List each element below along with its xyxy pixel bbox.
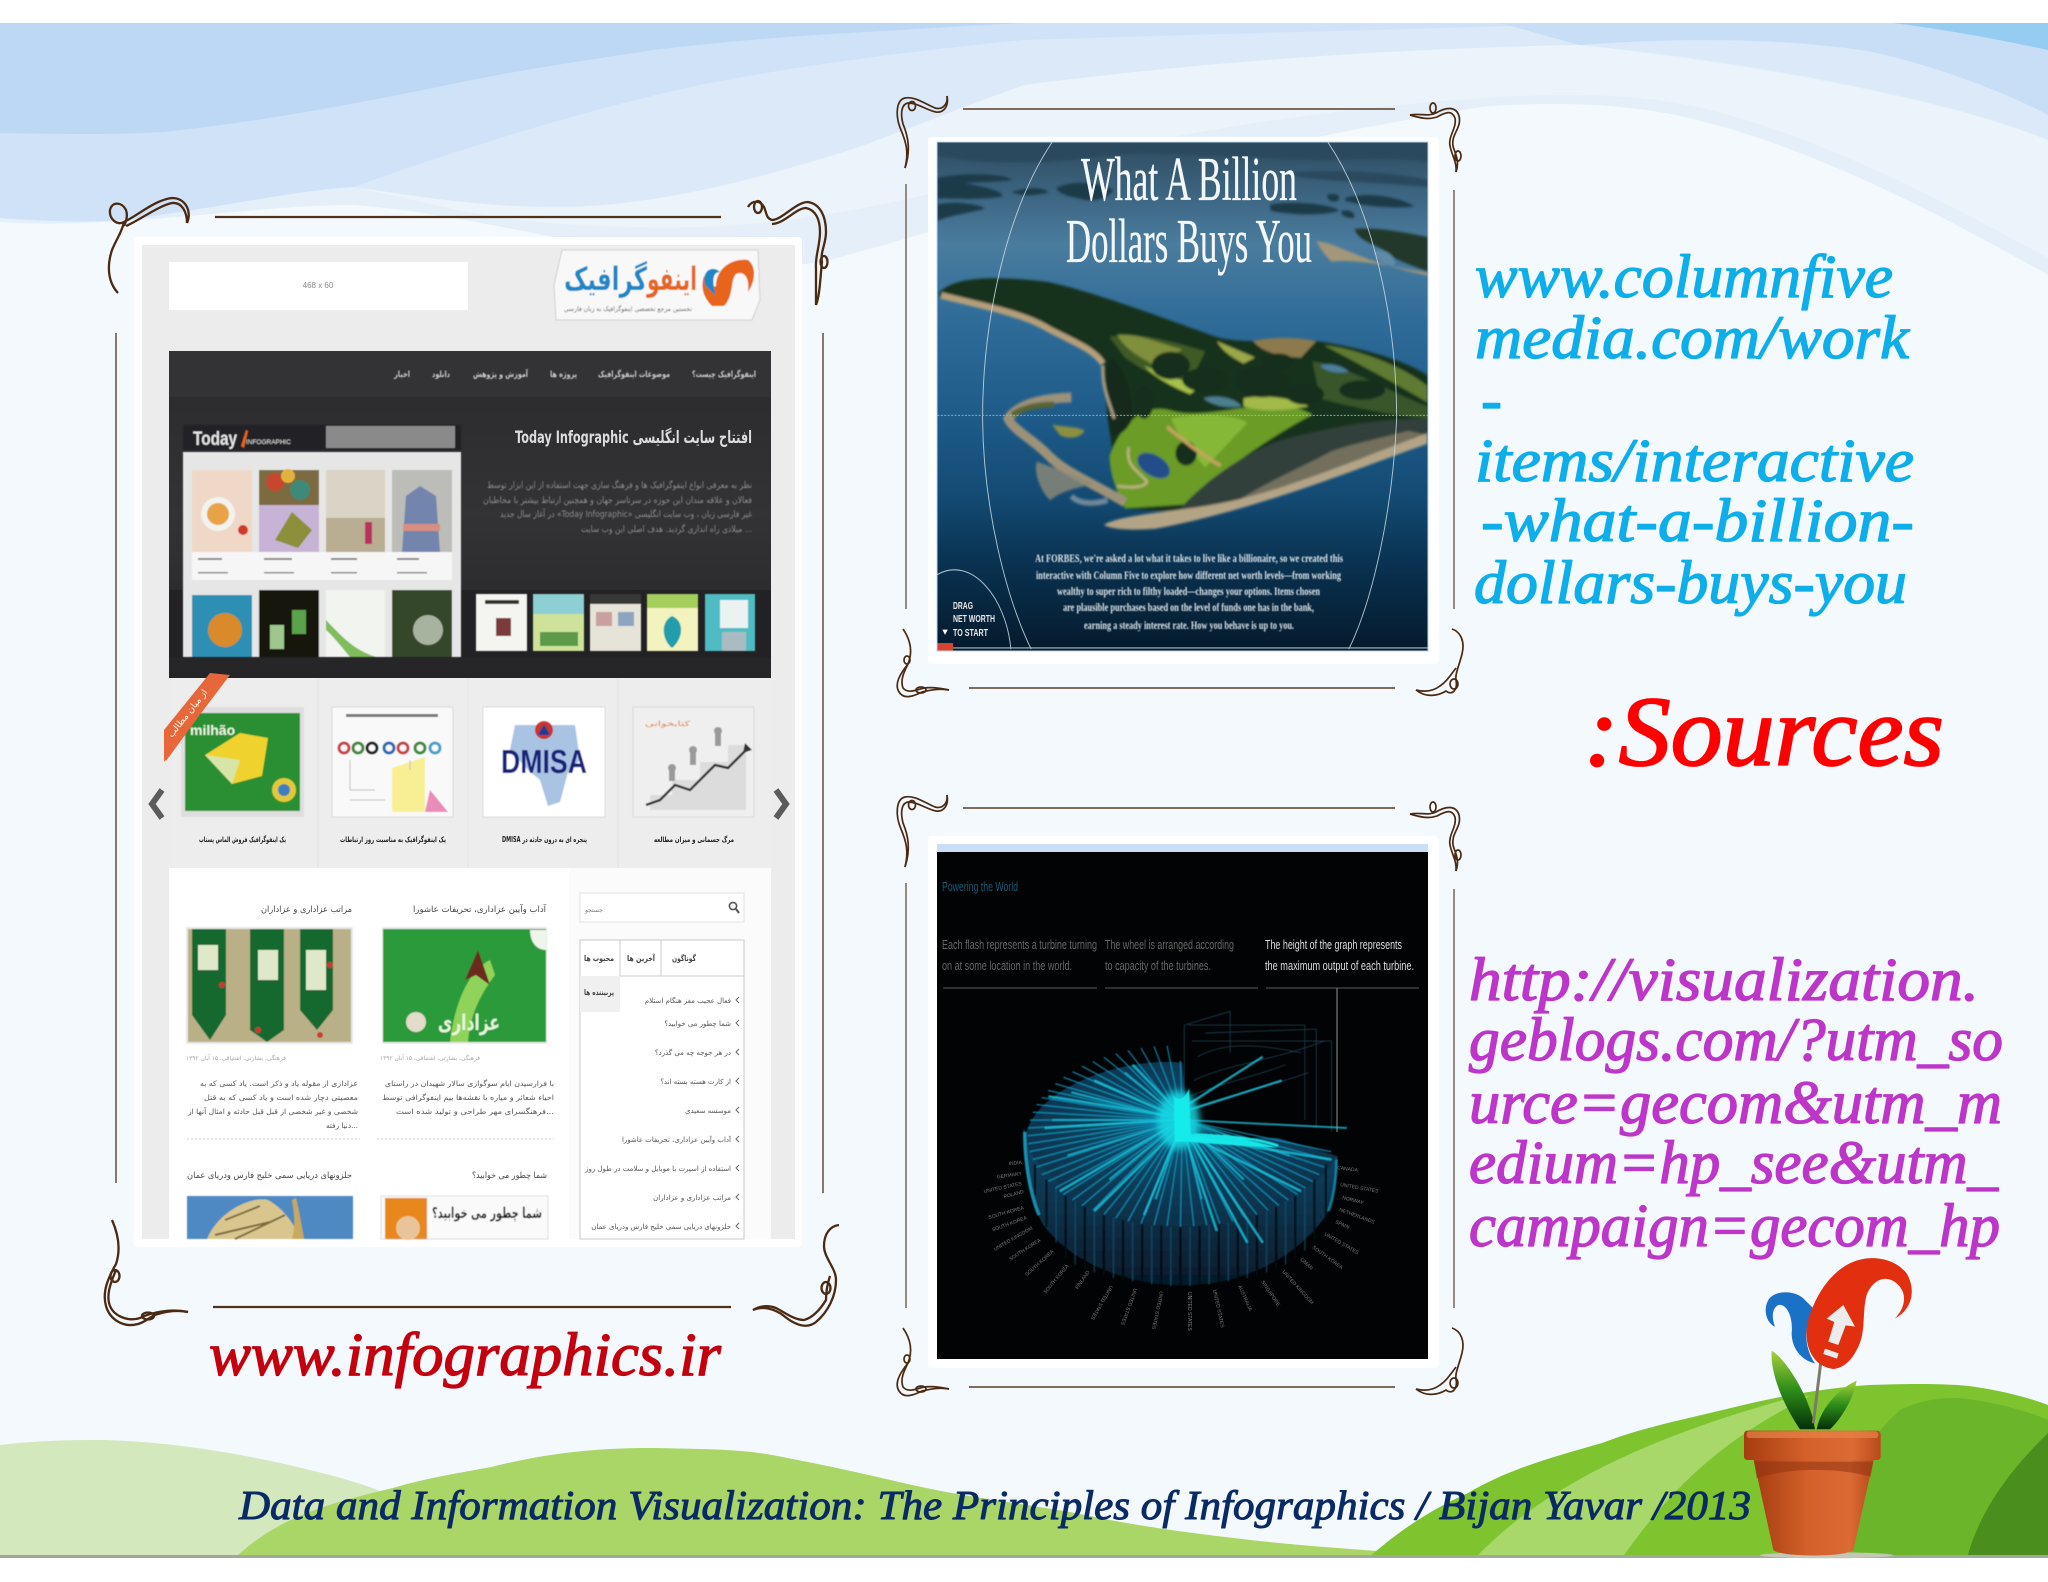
carousel captions: مرگ جسمانی و میزان مطالعه	[654, 834, 734, 844]
Today Infographic site preview	[183, 425, 461, 657]
navigation: آموزش و پژوهش	[473, 368, 529, 380]
article summaries	[187, 1079, 554, 1130]
article meta lines: فرهنگی، بشارتی، اشتیاقی، ۱۵ آبان ۱۳۹۲	[380, 1053, 480, 1062]
golf greens	[1110, 405, 1312, 508]
explanatory column 2: The wheel is arranged according	[1105, 937, 1234, 952]
article summaries: با فرارسیدن ایام سوگواری سالار شهیدان در راستای	[385, 1079, 554, 1088]
feature paragraph: میلادی راه اندازی گردید. هدف اصلی این وب سایت ...	[581, 523, 752, 535]
carousel of featured infographics	[152, 673, 786, 868]
source url: GE visualization: urce=gecom&utm_m	[1469, 1070, 2002, 1137]
country labels: UNITED STATES	[983, 1181, 1023, 1195]
image title: Dollars Buys You	[1066, 208, 1312, 276]
thumbnail: history of communication	[332, 707, 453, 817]
five small infographic thumbnails	[476, 594, 755, 651]
faint standing traces	[1184, 1011, 1332, 1136]
tabbed list: از کارت هسته بسته اند؟	[660, 1078, 731, 1086]
spokes	[1027, 1046, 1347, 1227]
article summaries: عزاداری از مقوله یاد و ذکر است. یاد کسی که به	[200, 1079, 358, 1088]
country labels: OMAN	[1299, 1257, 1314, 1272]
country labels: SOUTH KOREA	[1043, 1263, 1071, 1295]
navigation: موضوعات اینفوگرافیک	[598, 369, 670, 380]
dark featured header	[169, 351, 771, 678]
island aerial image	[937, 142, 1428, 651]
carousel captions: پنجره ای به درون حادثه در DMISA	[502, 835, 587, 844]
footer citation: Data and Information Visualization: The Principles of Infographics / Bijan Yavar /2013	[238, 1482, 1751, 1528]
country labels: SOUTH KOREA	[1024, 1249, 1056, 1278]
image title	[1066, 146, 1312, 276]
carousel arrows	[152, 790, 786, 818]
article summaries: فرهنگسرای مهر طراحی و تولید شده است...	[396, 1107, 554, 1116]
feature paragraph: نظر به معرفی انواع اینفوگرافیک ها و فرهنگ سازی جهت استفاده از این ابزار توسط	[487, 479, 752, 491]
article image: snail	[187, 1196, 353, 1239]
article image: how do you sleep	[381, 1196, 548, 1240]
search box	[580, 893, 744, 922]
navigation: اینفوگرافیک چیست؟	[692, 369, 756, 380]
country labels: UNITED KINGDOM	[993, 1226, 1034, 1253]
Today Infographic site preview: INFOGRAPHIC	[246, 439, 291, 446]
article image: ashura poster	[382, 927, 547, 1044]
article summaries: دنیا رفته...	[326, 1121, 358, 1130]
explanatory column 2: to capacity of the turbines.	[1105, 958, 1211, 973]
sand spit	[1008, 397, 1125, 502]
country labels: SOUTH KOREA	[988, 1205, 1025, 1221]
heading: Sources: :Sources	[1584, 676, 1944, 787]
panel: infographics.ir website screenshot	[134, 237, 802, 1247]
article headings: حلزونهای دریایی سمی خلیج فارس ودریای عمان	[187, 1171, 352, 1181]
ponds	[1136, 451, 1172, 480]
tabbed list: فعال عجیب مغز هنگام استلام	[645, 996, 731, 1005]
frame: turbine panel decorative border	[897, 795, 1463, 1396]
country labels: UNITED STATES	[1089, 1284, 1113, 1321]
source url: columnfive media: media.com/work	[1475, 305, 1910, 372]
drag hint: NET WORTH	[953, 614, 995, 625]
article headings: شما چطور می خوابید؟	[472, 1171, 547, 1181]
country labels: SOUTH KOREA	[991, 1215, 1028, 1233]
article summaries: احیاء شعائر و میاره با نقشه‌ها بیم اینفوگرافی توسط	[382, 1093, 554, 1102]
caption: infographics.ir url: www.infographics.ir	[209, 1322, 721, 1389]
article headings: مراتب عزاداری و عزاداران	[261, 905, 352, 915]
feature paragraph	[483, 479, 752, 535]
tabbed list: پربیننده ها	[584, 988, 614, 997]
explanatory column 3: the maximum output of each turbine.	[1265, 958, 1414, 973]
country labels: FINLAND	[1074, 1269, 1092, 1291]
cliff	[1179, 419, 1427, 510]
country labels: AUSTRALIA	[1236, 1284, 1253, 1313]
explanatory column 3	[1265, 937, 1414, 973]
country labels: POLAND	[1003, 1189, 1025, 1200]
source url: columnfive media: dollars-buys-you	[1474, 550, 1907, 617]
panel heading: Powering the World	[942, 879, 1018, 894]
distant islands	[937, 142, 1428, 276]
country labels: UNITED STATES	[1323, 1232, 1360, 1256]
navigation: اخبار	[393, 370, 410, 380]
ad placeholder	[169, 262, 468, 310]
country labels: SOUTH KOREA	[1008, 1237, 1043, 1263]
panel: Powering the World	[928, 836, 1439, 1368]
ribbon: از میان مطالب	[166, 688, 210, 740]
article headings: آداب وآیین عزاداری، تحریفات عاشورا	[413, 903, 547, 915]
image intro paragraph: earning a steady interest rate. How you behave is up to you.	[1084, 620, 1294, 632]
panel: What A Billion Dollars Buys You	[928, 137, 1439, 664]
image title: What A Billion	[1081, 146, 1297, 214]
feature paragraph: فعالان و علاقه مندان این حوزه در سرتاسر جهان و همچنین ارتباط بیشتر با مخاطبان	[483, 496, 752, 506]
feature paragraph: غیر فارسی زبان ، وب سایت انگلیسی «Today Infographic» در آغاز سال جدید	[500, 508, 752, 520]
image intro paragraph: wealthy to super rich to filthy loaded—changes your options. Items chosen	[1057, 586, 1320, 598]
navigation	[393, 368, 756, 380]
drag hint: DRAG	[953, 601, 973, 612]
search box: جستجو	[584, 907, 603, 914]
source url: GE visualization: edium=hp_see&utm_	[1469, 1130, 1998, 1197]
tabbed list: در هر جوجه چه می گذرد؟	[655, 1048, 731, 1057]
image intro paragraph: are plausible purchases based on the level of funds one has in the bank,	[1063, 602, 1314, 614]
explanatory column 1: Each flash represents a turbine turning	[942, 937, 1097, 952]
ad placeholder: 468 x 60	[303, 281, 334, 290]
country labels	[983, 1160, 1379, 1331]
article image: mourning ranks	[186, 927, 353, 1044]
carousel captions: یک اینفوگرافیک فروش الماس پستاب	[199, 835, 286, 844]
country labels: SOUTH KOREA	[1311, 1245, 1344, 1271]
tabbed list: آخرین ها	[627, 953, 655, 963]
sidebar	[569, 868, 771, 1239]
source url: GE visualization: campaign=gecom_hp	[1469, 1193, 2000, 1260]
icon: potted plant logo	[1744, 1258, 1912, 1558]
logo: site wordmark	[554, 250, 760, 320]
article image: how do you sleep: شما چطور می خوابید؟	[432, 1204, 542, 1223]
country labels: UNITED KINGDOM	[1281, 1269, 1314, 1306]
country labels: UNITED STATES	[1340, 1182, 1379, 1195]
country labels: NETHERLANDS	[1338, 1207, 1376, 1226]
article list	[169, 868, 569, 1240]
beaches	[1104, 433, 1427, 530]
source url: GE visualization	[1469, 947, 2003, 1260]
thumbnail: DMISA	[483, 707, 605, 817]
country labels: CANADA	[1337, 1165, 1359, 1174]
tabbed list: محبوب ها	[584, 954, 614, 963]
navigation: پروژه ها	[550, 370, 577, 380]
tabbed list: استفاده از اسپرت با موبایل و سلامت در طول روز	[584, 1165, 731, 1173]
country labels: UNITED STATES	[1150, 1291, 1164, 1330]
leaves and stem	[1772, 1351, 1857, 1429]
tabbed list: موسسه سعیدی	[685, 1107, 731, 1115]
thumbnail: milhao	[181, 707, 304, 817]
frame: island panel decorative border	[897, 96, 1463, 697]
image intro paragraph: interactive with Column Five to explore how different net worth levels—from working	[1036, 570, 1341, 582]
pot	[1744, 1431, 1881, 1555]
explanatory column 1	[942, 937, 1097, 973]
main island forest	[939, 278, 1428, 512]
carousel captions: یک اینفوگرافیک به مناسبت روز ارتباطات	[340, 835, 446, 844]
country labels: SINGAPORE	[1259, 1280, 1281, 1308]
article summaries: معصیتی دچار شده است و یاد کسی که به قتل	[204, 1093, 358, 1102]
article summaries: شخصی و غیر شخصی از قبل قبل حادثه و امثال آنها از	[187, 1106, 358, 1116]
country labels: INDIA	[1008, 1160, 1023, 1167]
tabbed list: آداب وآیین عزاداری، تحریفات عاشورا	[622, 1135, 732, 1144]
thumbnail: milhao: milhão	[190, 722, 235, 738]
article headings	[187, 903, 547, 1181]
Today Infographic site preview: Today	[193, 429, 237, 450]
frame: website screenshot decorative border	[105, 198, 839, 1326]
thumbnail: rising chart: کتابخوانی	[645, 720, 691, 728]
tabbed list: شما چطور می خوابید؟	[664, 1020, 731, 1028]
article image: ashura poster: عزاداری	[438, 1011, 500, 1036]
image intro paragraph: At FORBES, we're asked a lot what it takes to live like a billionaire, so we created this	[1035, 553, 1343, 565]
image intro paragraph	[1035, 553, 1343, 632]
drag hint	[953, 601, 995, 639]
explanatory column 2	[1105, 937, 1234, 973]
thumbnail: DMISA: DMISA	[501, 743, 587, 780]
tabbed list: حلزونهای دریایی سمی خلیج فارس ودریای عمان	[591, 1223, 731, 1231]
navigation: دانلود	[432, 370, 450, 380]
tabbed list: مراتب عزاداری و عزاداران	[653, 1194, 731, 1202]
explanatory column 3: The height of the graph represents	[1265, 937, 1402, 952]
source url: columnfive media: items/interactive	[1475, 428, 1914, 495]
radial turbine wheel chart	[1023, 1011, 1347, 1286]
drag hint: TO START	[953, 628, 988, 639]
source url: GE visualization: http://visualization.	[1469, 947, 1979, 1014]
article meta lines: فرهنگی، بشارتی، اشتیاقی، ۱۵ آبان ۱۳۹۲	[186, 1053, 286, 1062]
feature heading: افتتاح سایت انگلیسی Today Infographic	[515, 427, 752, 448]
tabbed list	[580, 940, 744, 1239]
circular overlay lines	[937, 142, 1428, 649]
source url: columnfive media: -what-a-billion-	[1481, 488, 1914, 555]
source url: columnfive media: -	[1481, 367, 1502, 434]
source url: columnfive media	[1474, 244, 1914, 617]
country labels: UNITED STATES	[1119, 1287, 1138, 1326]
source url: columnfive media: www.columnfive	[1475, 244, 1893, 311]
thumbnail: rising chart	[633, 707, 754, 817]
tabbed list: گوناگون	[672, 953, 696, 963]
article meta lines	[186, 1053, 480, 1062]
tree clusters	[1135, 352, 1385, 466]
country labels: GERMANY	[996, 1171, 1023, 1180]
country labels: UNITED STATES	[1186, 1292, 1192, 1331]
country labels: UNITED STATES	[1211, 1289, 1225, 1329]
country labels: SPAIN	[1334, 1219, 1350, 1231]
logo: site wordmark: اینفو	[646, 260, 697, 298]
logo: site wordmark: گرافیک	[564, 260, 647, 298]
carousel captions	[199, 834, 734, 844]
explanatory column 1: on at some location in the world.	[942, 958, 1072, 973]
country labels: NORWAY	[1342, 1195, 1365, 1206]
logo: site wordmark: نخستین مرجع تخصصی اینفوگرافیک به زبان فارسی	[564, 305, 692, 313]
ribbon	[164, 673, 230, 762]
flower	[1766, 1258, 1912, 1369]
background: green hills	[0, 1384, 2048, 1558]
source url: GE visualization: geblogs.com/?utm_so	[1469, 1007, 2003, 1074]
